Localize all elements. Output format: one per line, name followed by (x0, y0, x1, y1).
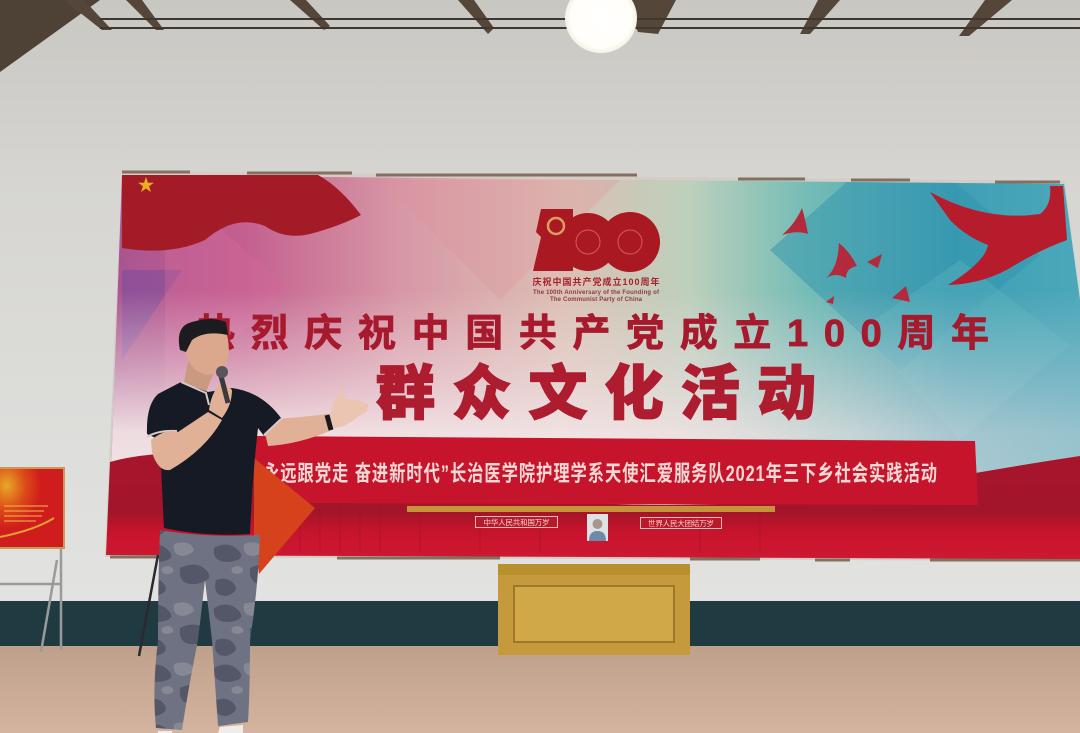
stand (0, 548, 61, 652)
hair (179, 319, 228, 352)
sleeve trim (147, 419, 281, 437)
camo trousers (154, 530, 260, 730)
logo caption: 庆祝中国共产党成立100周年 (532, 276, 660, 287)
banner lower fade (100, 290, 1080, 480)
wristband (327, 415, 331, 430)
flag top right (930, 186, 1067, 285)
banner lower red (106, 454, 1080, 559)
right arm extended (262, 414, 332, 446)
neck (184, 362, 214, 392)
party logo 100 (532, 209, 660, 303)
red slogan ribbon (254, 436, 978, 505)
banner (100, 135, 1080, 561)
slogan right (640, 518, 722, 528)
flag top left (122, 175, 361, 251)
hand and microphone (209, 366, 232, 418)
slogan right: 世界人民大团结万岁 (648, 518, 714, 528)
banner background (108, 175, 1080, 558)
folds (300, 505, 760, 553)
party logo 100: The Communist Party of China (550, 297, 643, 303)
flag star: ★ (138, 176, 154, 195)
gold bar (407, 506, 775, 512)
dark wall skirting (0, 601, 1080, 647)
portrait (587, 514, 608, 541)
left notice board (0, 468, 64, 652)
red flag (254, 458, 315, 574)
shoe (218, 725, 243, 733)
roof timber corner (0, 0, 1012, 72)
floor (0, 646, 1080, 733)
singer (147, 319, 368, 733)
birds (782, 208, 910, 304)
banner diamonds (122, 135, 1070, 440)
collar (181, 382, 209, 405)
wooden podium (498, 564, 690, 655)
open hand (330, 390, 368, 428)
ceiling lamp (565, 0, 637, 53)
frame dark segments (110, 172, 1080, 560)
left forearm (151, 412, 222, 470)
main title: 热烈庆祝中国共产党成立100周年 (197, 313, 989, 355)
logo english caption: The 100th Anniversary of the Founding of (533, 290, 660, 296)
red slogan ribbon: “永远跟党走 奋进新时代”长治医学院护理学系天使汇爱服务队2021年三下乡社会实践活动 (254, 461, 937, 487)
slogan left (476, 516, 558, 528)
subtitle: 群众文化活动 (376, 361, 816, 427)
flagpole (139, 555, 158, 656)
head (183, 330, 229, 375)
slogan left: 中华人民共和国万岁 (484, 517, 550, 527)
roof wires (100, 19, 1080, 28)
banner frame (105, 171, 1080, 561)
polo shirt (147, 382, 281, 535)
